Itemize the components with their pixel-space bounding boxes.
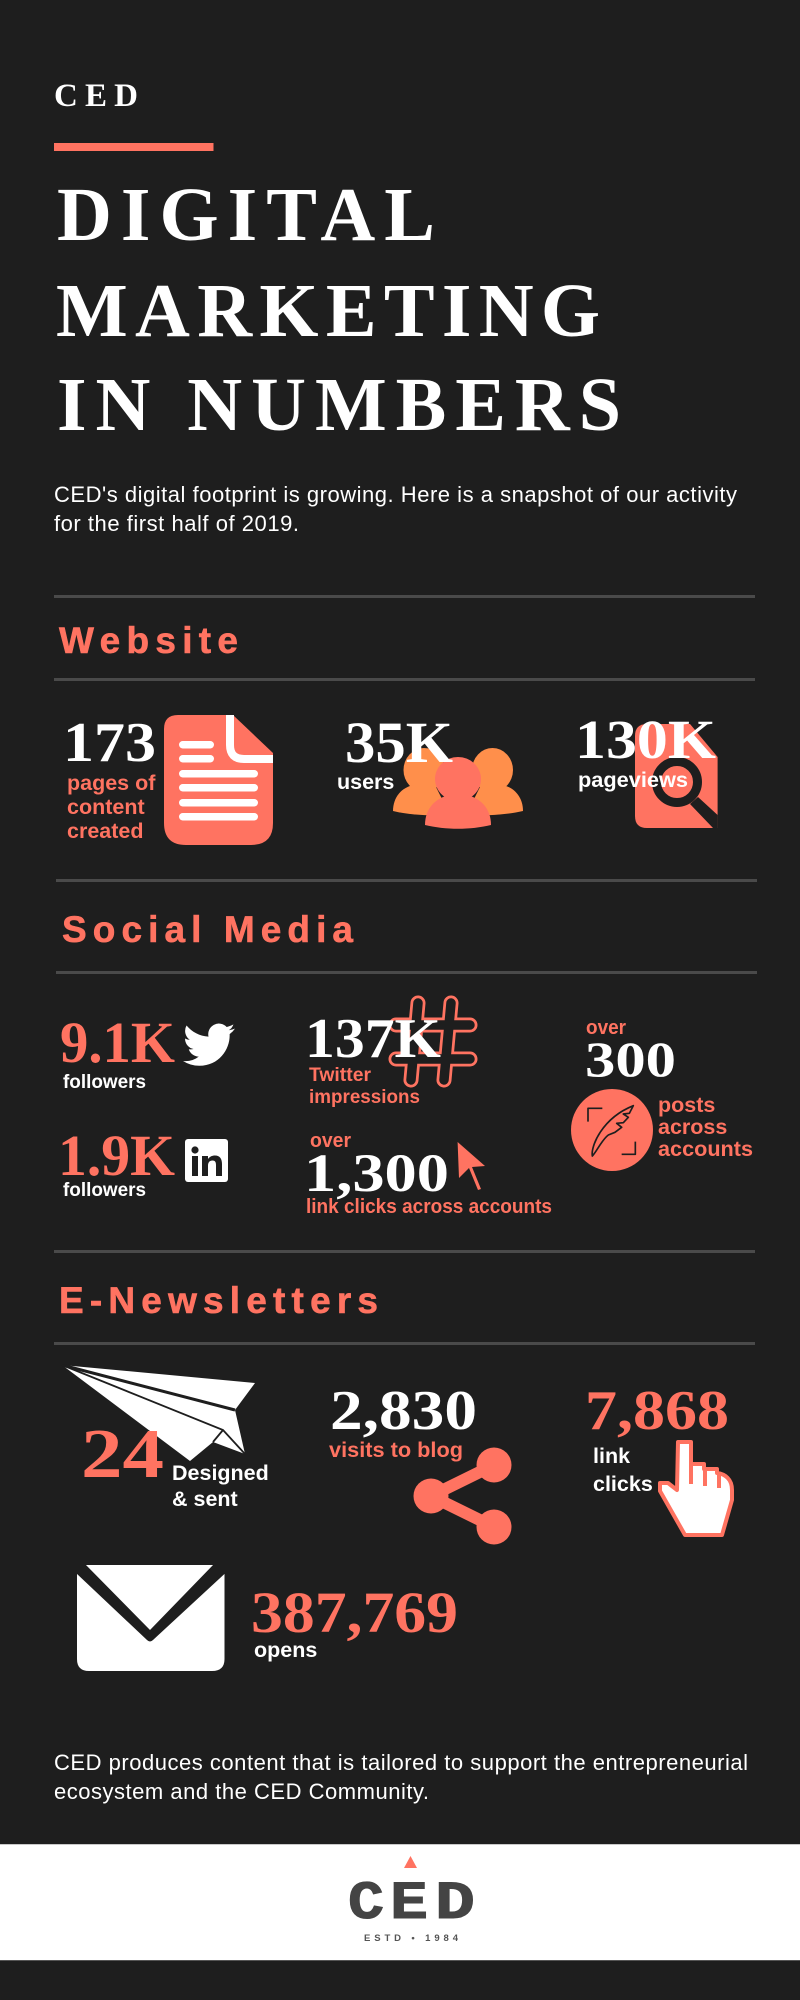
- stat: 35K users: 35K: [345, 710, 453, 775]
- stat: 24 designed and sent: Designed: [172, 1461, 269, 1485]
- icon: page search: [635, 724, 718, 828]
- title: DIGITAL: [57, 173, 435, 257]
- icon: users: [393, 748, 523, 829]
- closing text: [54, 1750, 748, 1804]
- intro text: CED's digital footprint is growing. Here is a snapshot of our activity: [54, 482, 737, 507]
- logo wordmark: E: [390, 1874, 428, 1935]
- stat: over 300: 300: [585, 1031, 676, 1087]
- panel: e-newsletters: [54, 1250, 755, 1671]
- heading: e-newsletters: E-Newsletters: [59, 1280, 378, 1321]
- stat: twitter impressions: [305, 1008, 441, 1108]
- footer band with logo: [0, 1844, 800, 1961]
- title: [56, 173, 621, 447]
- stat: twitter followers: followers: [63, 1071, 146, 1093]
- icon: paper plane: [62, 1365, 255, 1461]
- text: posts across accounts: across: [658, 1115, 727, 1139]
- stat: over 300: [585, 1017, 676, 1087]
- heading: social media: Social Media: [62, 909, 353, 950]
- stat: over 1,300 link clicks: 1,300: [304, 1143, 449, 1203]
- closing text: CED produces content that is tailored to support the entrepreneurial: [54, 1750, 748, 1775]
- stat: 130K pageviews: pageviews: [578, 768, 688, 792]
- stat: linkedin followers: followers: [63, 1179, 146, 1201]
- stat: 7,868 link clicks: clicks: [593, 1472, 653, 1496]
- icon: cursor: [458, 1142, 485, 1190]
- icon: hashtag: [396, 1003, 470, 1080]
- text: posts across accounts: posts: [658, 1093, 715, 1117]
- stat: 173 pages: created: [67, 819, 144, 843]
- stat: 2,830 visits to blog: [329, 1380, 477, 1462]
- panel: website: [54, 595, 755, 845]
- stat: 387,769 opens: opens: [254, 1638, 317, 1662]
- stat: twitter impressions: impressions: [309, 1086, 420, 1108]
- stat: 24 designed and sent: [81, 1416, 269, 1511]
- logo triangle: [404, 1856, 417, 1868]
- title: IN NUMBERS: [57, 363, 621, 447]
- stat: 173 pages: pages of: [67, 771, 156, 795]
- stat: 35K users: [337, 710, 453, 794]
- stat: 24 designed and sent: 24: [81, 1416, 164, 1493]
- stat: over 1,300 link clicks: [304, 1130, 552, 1218]
- stat: linkedin followers: 1.9K: [58, 1123, 175, 1188]
- logo wordmark: C: [348, 1874, 384, 1935]
- icon: share: [414, 1448, 512, 1544]
- stat: 7,868 link clicks: 7,868: [585, 1380, 729, 1442]
- stat: 35K users: users: [337, 770, 394, 794]
- logo tagline: ESTD • 1984: [364, 1933, 459, 1944]
- stat: 7,868 link clicks: [585, 1380, 729, 1496]
- icon: quill in circle: [571, 1089, 653, 1171]
- stat: over 1,300 link clicks: link clicks across accounts: [306, 1196, 552, 1218]
- stat: 130K pageviews: 130K: [575, 709, 716, 770]
- stat: 130K pageviews: [575, 709, 716, 792]
- stat: twitter impressions: Twitter: [309, 1064, 371, 1086]
- header brand: CED: CED: [54, 78, 138, 114]
- text: posts across accounts: accounts: [658, 1137, 753, 1161]
- stat: 2,830 visits to blog: 2,830: [330, 1380, 477, 1442]
- intro text: for the first half of 2019.: [54, 511, 299, 536]
- icon: pointing hand: [660, 1442, 732, 1535]
- text: posts across accounts: [658, 1093, 753, 1161]
- accent bar: [54, 143, 214, 151]
- icon: twitter bird: [183, 1024, 235, 1066]
- stat: 173 pages: 173: [63, 712, 156, 774]
- stat: over 300: over: [586, 1017, 626, 1039]
- intro text: [54, 482, 737, 536]
- heading: website: Website: [59, 620, 238, 661]
- stat: 7,868 link clicks: link: [593, 1444, 630, 1468]
- icon: document: [164, 715, 273, 845]
- logo wordmark: [348, 1874, 475, 1935]
- stat: twitter impressions: 137K: [305, 1008, 441, 1070]
- stat: 2,830 visits to blog: visits to blog: [329, 1438, 463, 1462]
- icon: envelope: [76, 1564, 226, 1671]
- closing text: ecosystem and the CED Community.: [54, 1779, 429, 1804]
- stat: 173 pages: [63, 712, 156, 843]
- stat: 24 designed and sent: & sent: [172, 1487, 238, 1511]
- icon: linkedin: [185, 1139, 228, 1182]
- stat: 387,769 opens: 387,769: [251, 1580, 458, 1645]
- title: MARKETING: [56, 269, 600, 353]
- stat: 173 pages: content: [67, 795, 145, 819]
- stat: twitter followers: 9.1K: [60, 1010, 175, 1075]
- panel: social media: [56, 879, 757, 1218]
- stat: over 1,300 link clicks: over: [310, 1130, 351, 1152]
- logo wordmark: D: [435, 1874, 475, 1935]
